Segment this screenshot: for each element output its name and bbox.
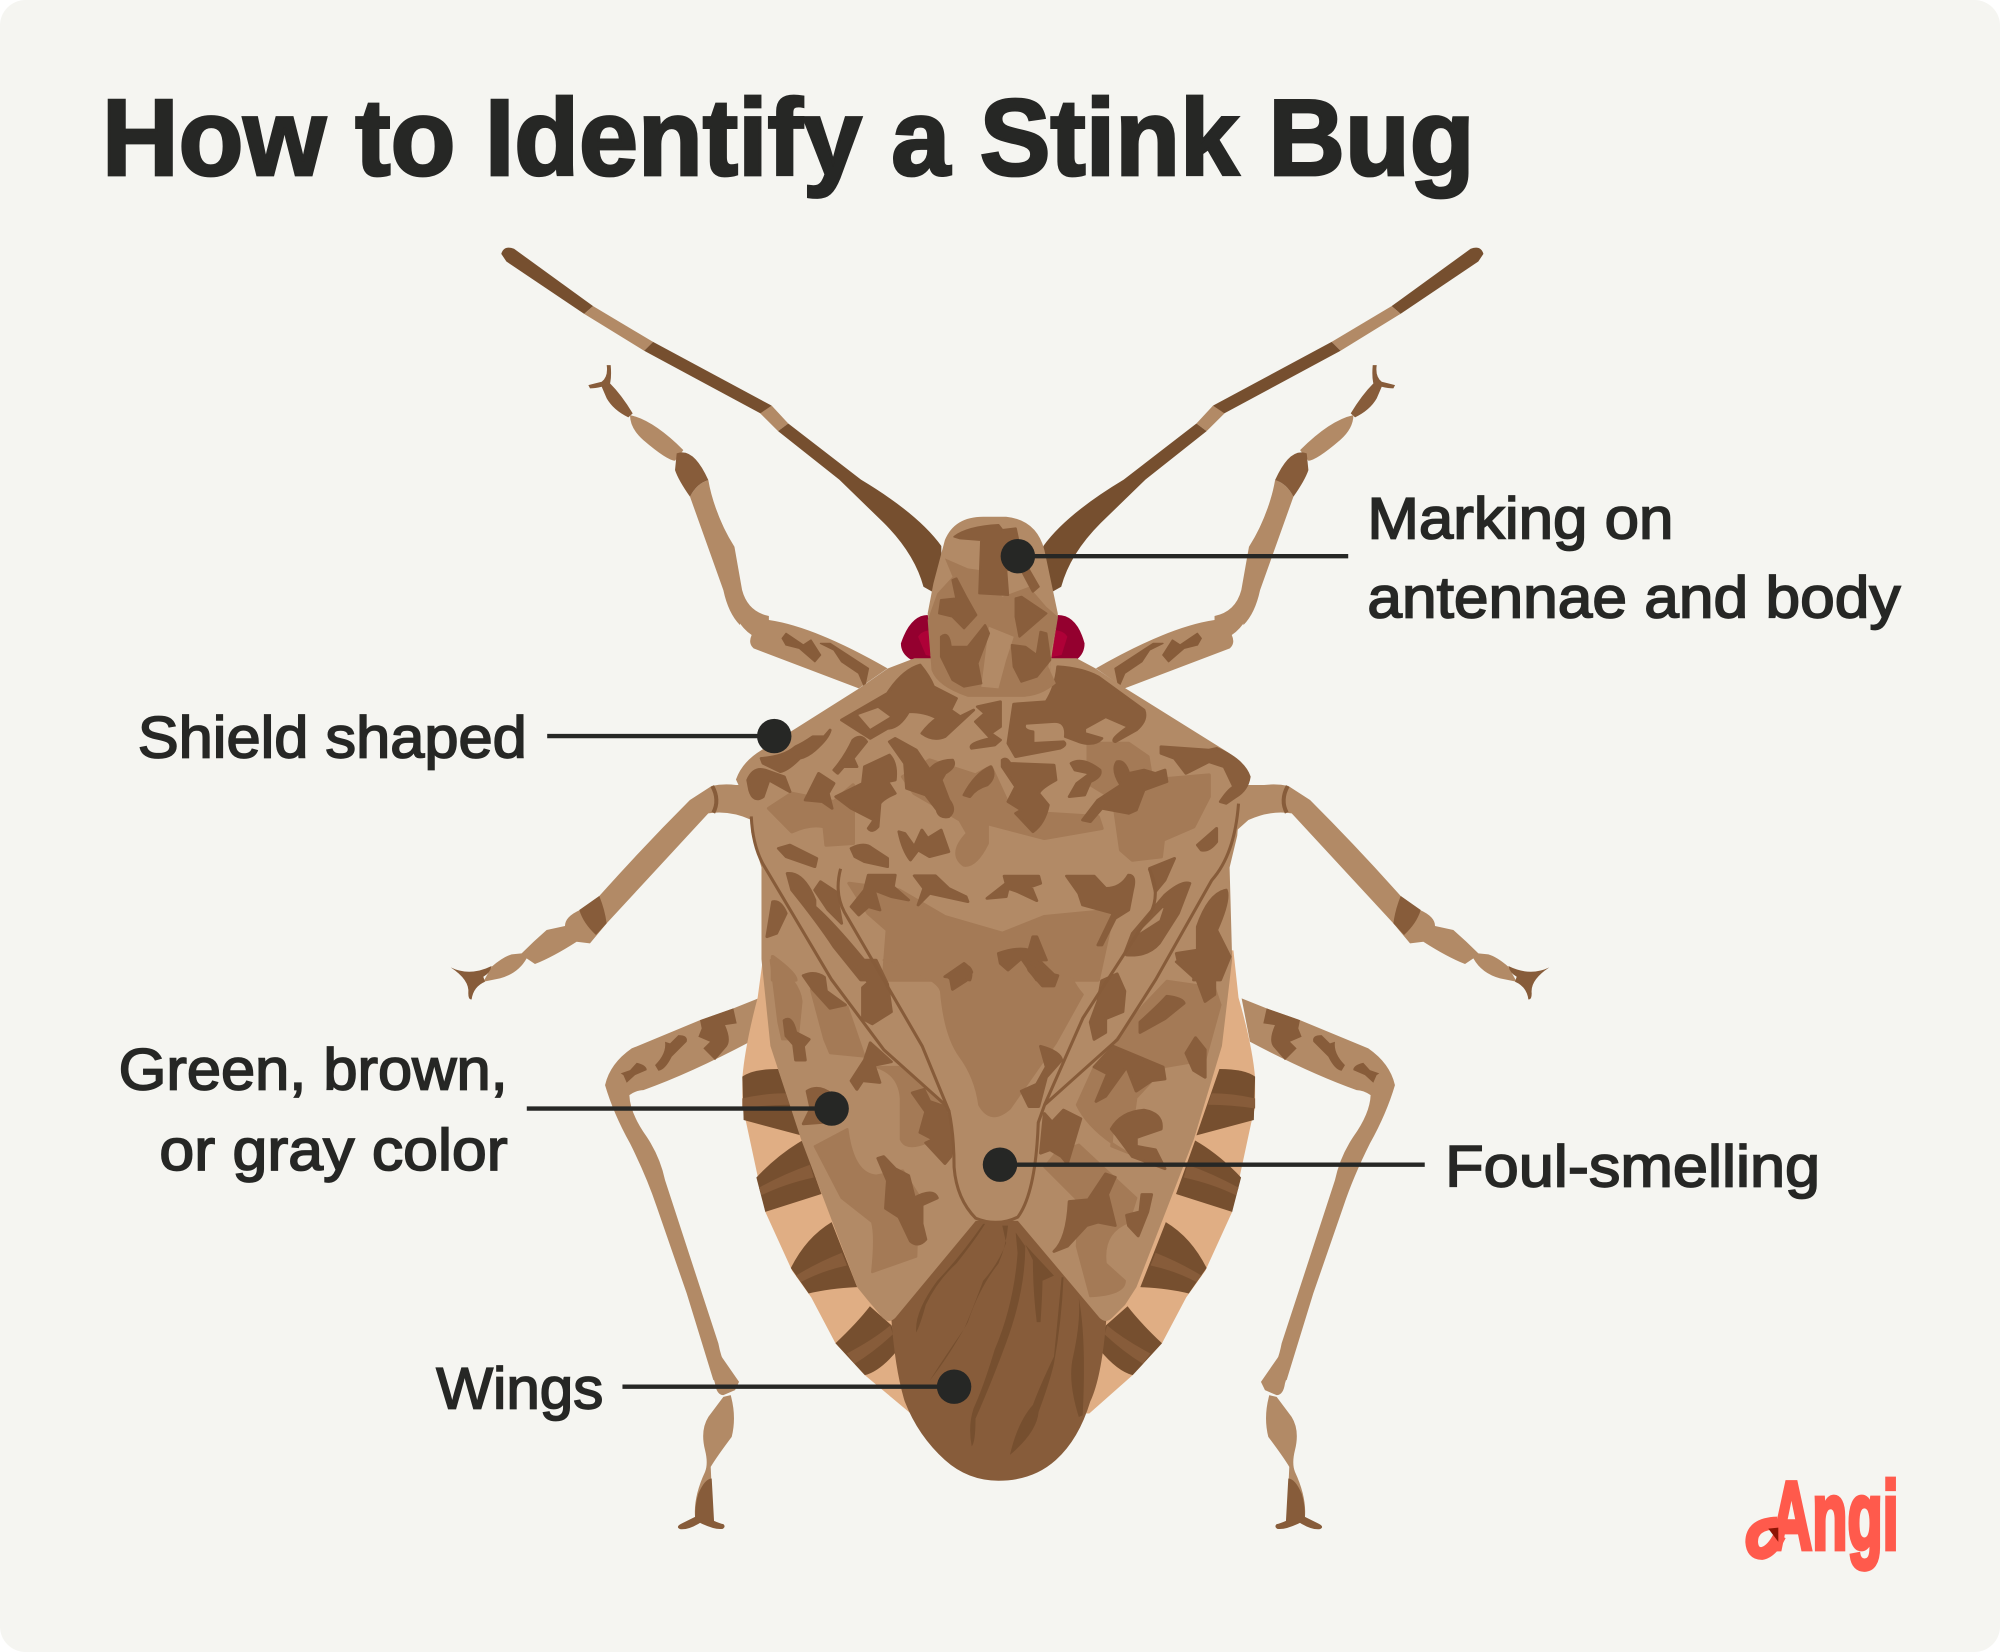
callout: marking on antennae and body: Marking on <box>1367 486 1673 551</box>
callout: foul-smelling <box>983 1134 1820 1199</box>
left middle leg <box>451 784 767 999</box>
body shell <box>736 658 1250 1321</box>
illustration: stink bug <box>451 248 1549 1529</box>
left front leg <box>588 365 888 688</box>
callout: shield shaped <box>138 706 791 771</box>
right front leg <box>1096 365 1395 688</box>
right hind leg <box>1242 998 1395 1529</box>
callout: shield shaped: Shield shaped <box>138 706 527 771</box>
abdomen bands left <box>742 1069 898 1375</box>
wing dark markings <box>784 960 1220 1251</box>
callout: wings <box>436 1356 971 1421</box>
callout: wings: Wings <box>436 1356 603 1421</box>
left antenna <box>501 248 941 593</box>
wing veins <box>916 1224 1084 1455</box>
title: How to Identify a Stink Bug <box>102 77 1474 198</box>
callout: green, brown, or gray color <box>119 1037 849 1183</box>
pronotum mid-tone mottling <box>769 743 1209 980</box>
left hind leg <box>605 998 758 1529</box>
wing mid-tone mottling <box>771 960 1220 1296</box>
abdomen bands right <box>1099 1069 1255 1375</box>
wings: membrane <box>891 1215 1106 1481</box>
scutellum and wing outlines <box>751 804 1239 1222</box>
head <box>928 517 1058 697</box>
pronotum dark markings <box>748 665 1249 980</box>
callout: marking on antennae and body: antennae and body <box>1367 565 1901 630</box>
callout: green, brown, or gray color: or gray color <box>159 1118 508 1183</box>
eye left and right <box>901 615 1085 659</box>
right middle leg <box>1233 784 1549 999</box>
abdomen: connexivum <box>742 950 1255 1413</box>
logo: Angi <box>1752 1462 1899 1570</box>
callout: green, brown, or gray color: Green, brown, <box>119 1037 508 1102</box>
right antenna <box>1043 248 1483 593</box>
callout: foul-smelling: Foul-smelling <box>1445 1134 1820 1199</box>
callout: marking on antennae and body <box>1001 486 1901 630</box>
logo: Angi: Angi <box>1771 1462 1899 1570</box>
